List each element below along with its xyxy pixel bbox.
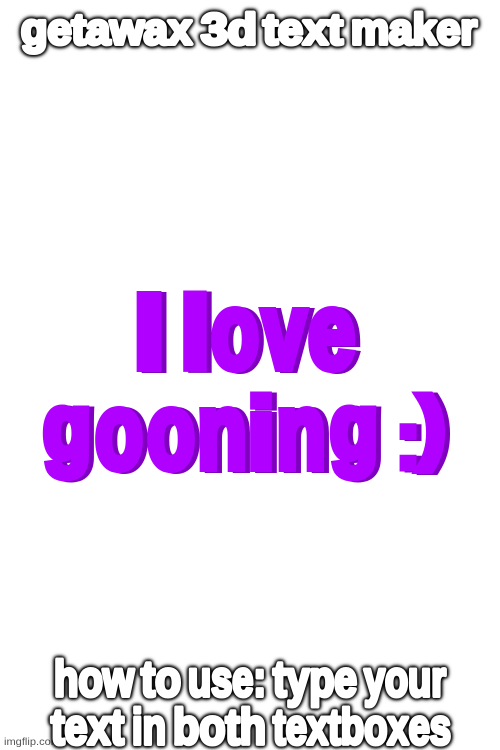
title: 3d [201,5,257,54]
caption: how to use: how [54,651,134,707]
3d text: gooning :): g [43,376,91,478]
3d text: gooning :): n [202,371,252,492]
watermark: imgflip.com: imgflip.com [4,736,60,748]
3d text: gooning :): o [152,371,200,492]
3d text: gooning :): o [95,370,143,491]
3d text: gooning :): n [276,370,326,491]
caption: how to use: your [364,651,446,707]
3d text: gooning :): ) [425,383,449,471]
3d text: gooning :): g [330,376,378,478]
title: getawax [21,5,193,54]
3d text: gooning :): : [399,394,427,489]
3d text: gooning :): n [197,370,247,491]
title: text [263,5,343,54]
3d text: I love: o [216,271,264,392]
3d text: I love: l [181,278,209,388]
3d text: gooning :): i [247,378,275,490]
title: maker [351,5,477,54]
3d text: I love [135,270,360,392]
title [21,5,477,54]
caption: how to use: type [273,651,357,707]
3d text: I love: e [313,271,360,392]
3d text: I love: v [262,270,306,391]
3d text: gooning :): o [100,371,148,492]
3d text: gooning :): g [48,377,96,479]
3d text: I love: e [308,270,355,391]
3d text: I love: o [211,270,259,391]
3d text: gooning :): n [281,371,331,492]
caption: how to use: to [141,651,181,707]
3d text: gooning :): : [394,393,422,488]
3d text: gooning :): i [252,379,280,491]
3d text: I love: I [140,275,168,390]
3d text: gooning :) [43,370,449,492]
3d text: gooning :): ) [420,382,444,470]
3d text: I love: l [186,279,214,389]
3d text: gooning :): g [335,377,383,479]
3d text: gooning :): o [147,370,195,491]
3d text: I love: v [267,271,311,392]
caption: how to use [51,651,451,750]
caption: how to use: use: [188,651,266,707]
3d text: I love: I [135,274,163,389]
